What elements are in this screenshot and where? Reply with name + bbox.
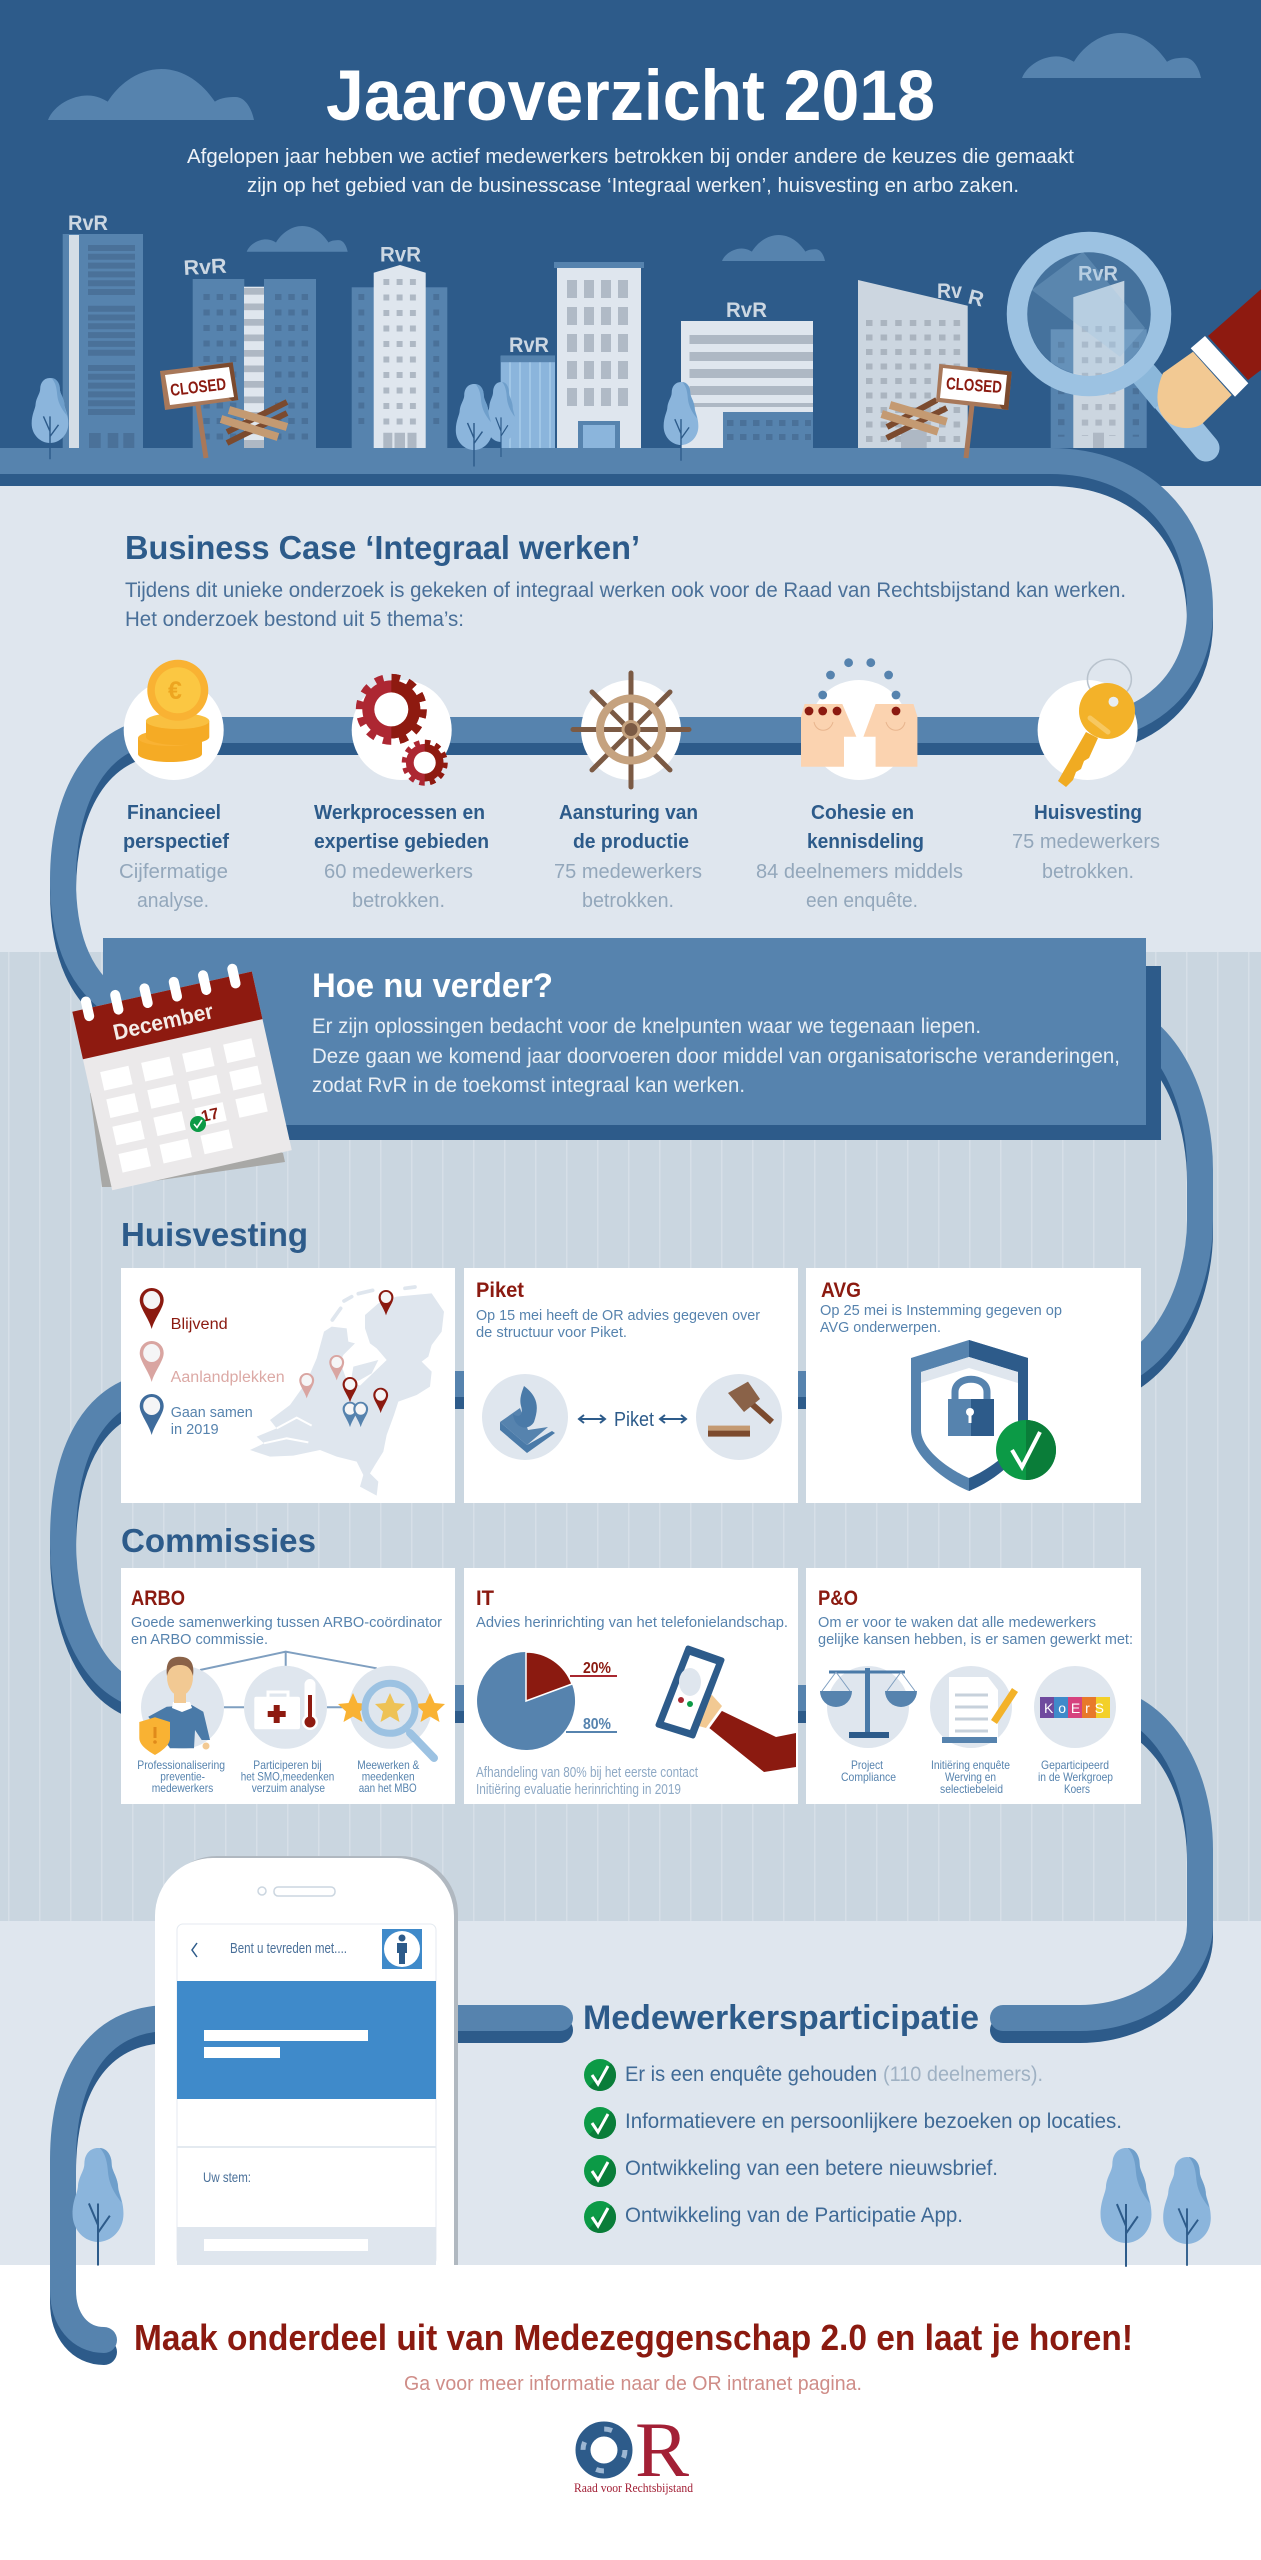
- panel: ARBO: ARBO: [131, 1587, 185, 1610]
- P&O labels: [841, 1758, 1113, 1796]
- building 6: [681, 299, 813, 448]
- background: business case: [0, 486, 1261, 952]
- panel: AVG: AVG: [821, 1279, 861, 1302]
- panel: IT: IT: [476, 1587, 494, 1610]
- intro text: [187, 146, 1074, 197]
- background: footer: [0, 2265, 1261, 2560]
- panel: Piket: Piket: [476, 1279, 524, 1302]
- icon: gears: [360, 678, 445, 783]
- theme 2 label: Werkprocessen en: [314, 802, 485, 824]
- icon: calendar: 17: [200, 1105, 221, 1126]
- P&O labels: Werving en: [945, 1770, 996, 1784]
- P&O labels: selectiebeleid: [940, 1782, 1003, 1796]
- building 3: [352, 244, 447, 448]
- building 2: [183, 255, 316, 448]
- theme 5 label: [1012, 802, 1160, 883]
- logo: [574, 2406, 693, 2495]
- background: participation: [0, 1921, 1261, 2265]
- theme 2 label: [314, 802, 489, 912]
- phone mockup: Bent u tevreden met....: [230, 1940, 347, 1957]
- icon: prevention worker: [139, 1657, 224, 1755]
- panel: IT: Afhandeling van 80% bij het eerste contact: [476, 1764, 699, 1781]
- theme 4 label: 84 deelnemers middels: [756, 861, 963, 883]
- heading: Huisvesting: Huisvesting: [121, 1216, 308, 1253]
- road: main serpentine path: [0, 461, 1200, 2340]
- checklist: Ontwikkeling van een betere nieuwsbrief.: [625, 2157, 998, 2180]
- title: Jaaroverzicht 2018: [326, 57, 935, 136]
- Netherlands map: [250, 1287, 444, 1496]
- building 8: [1051, 263, 1147, 448]
- closed sign right: [882, 364, 1012, 458]
- icon: calendar: December: [111, 998, 216, 1045]
- icon: two heads: [801, 658, 917, 767]
- theme 5 label: Huisvesting: [1034, 802, 1142, 824]
- icon: police flame: [482, 1374, 568, 1460]
- P&O labels: in de Werkgroep: [1038, 1770, 1113, 1784]
- icon: hand with phone: [658, 1648, 796, 1772]
- business case intro: [125, 579, 1126, 631]
- panel: Hoe nu verder: Er zijn oplossingen bedacht voor de knelpunten waar we tegenaan liepen.: [312, 1015, 981, 1038]
- checklist: Informatievere en persoonlijkere bezoeken op locaties.: [625, 2110, 1122, 2133]
- ARBO labels: verzuim analyse: [252, 1781, 325, 1795]
- theme 1 label: analyse.: [137, 890, 209, 912]
- pie chart: 80%: [583, 1716, 611, 1733]
- ARBO labels: Professionalisering: [137, 1758, 225, 1772]
- building 5: [554, 262, 644, 448]
- arrows and Piket label: [579, 1409, 686, 1431]
- theme 5 label: 75 medewerkers: [1012, 831, 1160, 853]
- building 7: Rv: [937, 280, 962, 303]
- ARBO labels: preventie-: [160, 1770, 205, 1784]
- heading: Commissies: Commissies: [121, 1522, 316, 1559]
- connector lines: [200, 1652, 377, 1707]
- map pins: [299, 1290, 393, 1427]
- legend: [140, 1288, 285, 1438]
- panel: P&O: [806, 1568, 1141, 1804]
- P&O labels: Initiëring enquête: [931, 1758, 1010, 1772]
- panel: Hoe nu verder: [103, 938, 1161, 1140]
- building 3: RvR: [380, 244, 421, 267]
- heading: Business Case: Business Case ‘Integraal werken’: [125, 529, 640, 566]
- road: shadow: [0, 473, 1200, 2352]
- building 7: [858, 280, 986, 448]
- P&O labels: Koers: [1064, 1782, 1090, 1796]
- icon: magnifier with stars: [338, 1666, 445, 1758]
- building 6: RvR: [726, 299, 767, 322]
- closed sign left: CLOSED: [169, 374, 227, 400]
- panel: Piket: [464, 1268, 798, 1503]
- theme 4 label: Cohesie en: [811, 802, 914, 824]
- trees: [73, 2148, 1211, 2267]
- icon: calendar: [70, 960, 292, 1190]
- background: striped section: [0, 952, 1261, 1921]
- building 8: RvR: [1078, 263, 1118, 286]
- icon: first aid and thermometer: [244, 1666, 327, 1749]
- closed sign left: [160, 362, 287, 458]
- business case intro: Tijdens dit unieke onderzoek is gekeken of integraal werken ook voor de Raad van Rechtsbijstand kan werken.: [125, 579, 1126, 602]
- panel: ARBO: [121, 1568, 455, 1804]
- clouds: [48, 33, 1201, 261]
- ARBO labels: Participeren bij: [253, 1758, 322, 1772]
- business case intro: Het onderzoek bestond uit 5 thema’s:: [125, 608, 464, 631]
- icon: key: [1058, 659, 1135, 787]
- building 4: [501, 334, 555, 448]
- legend: Gaan samen: [171, 1404, 253, 1421]
- theme 3 label: 75 medewerkers: [554, 861, 702, 883]
- theme 1 label: Cijfermatige: [119, 861, 228, 883]
- building 2: RvR: [183, 255, 227, 280]
- icon: scales: [820, 1666, 917, 1748]
- icon: coins: [138, 660, 209, 762]
- ARBO labels: het SMO,meedenken: [241, 1770, 334, 1784]
- theme 2 label: expertise gebieden: [314, 831, 489, 853]
- ARBO labels: [137, 1758, 419, 1795]
- checklist: (110 deelnemers).: [883, 2063, 1043, 2086]
- checklist: [584, 2059, 1122, 2233]
- building 4: RvR: [509, 334, 549, 357]
- pie chart: [477, 1652, 617, 1750]
- legend: in 2019: [171, 1421, 219, 1438]
- icon: ship wheel: [573, 673, 689, 787]
- panel: Hoe nu verder: Hoe nu verder?: [312, 967, 553, 1005]
- phone mockup: [155, 1856, 458, 2265]
- icon: document and pencil: [930, 1666, 1018, 1748]
- intro text: Afgelopen jaar hebben we actief medewerkers betrokken bij onder andere de keuzes die gemaakt: [187, 146, 1074, 168]
- panel: AVG: [806, 1268, 1141, 1503]
- magnifying glass with hand: [1017, 242, 1261, 448]
- closed sign right: CLOSED: [945, 374, 1003, 397]
- intro text: zijn op het gebied van de businesscase ‘Integraal werken’, huisvesting en arbo zaken.: [247, 175, 1019, 197]
- icon: shield with lock: [911, 1340, 1056, 1491]
- icon: gavel: [696, 1374, 782, 1460]
- panel: IT: Initiëring evaluatie herinrichting in 2019: [476, 1781, 681, 1798]
- legend: Blijvend: [171, 1316, 228, 1333]
- panel: IT: [464, 1568, 798, 1804]
- P&O labels: Geparticipeerd: [1041, 1758, 1109, 1772]
- panel: map card: [121, 1268, 455, 1503]
- icon: Koers logo: [1034, 1666, 1116, 1748]
- theme 3 label: betrokken.: [582, 890, 674, 912]
- panel: Hoe nu verder: zodat RvR in de toekomst integraal kan werken.: [312, 1074, 745, 1097]
- phone mockup: Uw stem:: [203, 2169, 251, 2185]
- checklist: Ontwikkeling van de Participatie App.: [625, 2204, 963, 2227]
- legend: Aanlandplekken: [171, 1369, 285, 1386]
- ARBO labels: Meewerken &: [357, 1758, 419, 1772]
- ARBO labels: medewerkers: [152, 1781, 213, 1795]
- building 1: [63, 212, 143, 448]
- logo: R: [635, 2406, 689, 2493]
- theme 4 label: een enquête.: [806, 890, 918, 912]
- theme 3 label: Aansturing van: [559, 802, 698, 824]
- building 1: RvR: [68, 212, 108, 235]
- ARBO labels: aan het MBO: [359, 1781, 417, 1795]
- theme 1 label: perspectief: [123, 831, 229, 853]
- logo: Raad voor Rechtsbijstand: [574, 2480, 693, 2495]
- theme 2 label: betrokken.: [352, 890, 445, 912]
- theme 1 label: Financieel: [127, 802, 221, 824]
- panel: Hoe nu verder: Deze gaan we komend jaar doorvoeren door middel van organisatorische veranderingen,: [312, 1045, 1120, 1068]
- icon: Koers logo: KoErS: [1044, 1700, 1104, 1716]
- panel: AVG: Op 25 mei is Instemming gegeven op: [820, 1302, 1062, 1319]
- panel: P&O: gelijke kansen hebben, is er samen gewerkt met:: [818, 1631, 1133, 1648]
- theme 3 label: de productie: [573, 831, 689, 853]
- panel: P&O: P&O: [818, 1587, 858, 1610]
- skyline trees: [32, 378, 698, 466]
- P&O labels: Compliance: [841, 1770, 896, 1784]
- panel: IT: Advies herinrichting van het telefonielandschap.: [476, 1614, 788, 1631]
- app icon: [382, 1929, 422, 1969]
- heading: Medewerkersparticipatie: Medewerkersparticipatie: [583, 1999, 979, 2037]
- ARBO labels: meedenken: [362, 1770, 415, 1784]
- theme 4 label: [756, 802, 963, 912]
- theme 4 label: kennisdeling: [807, 831, 924, 853]
- checklist: Er is een enquête gehouden: [625, 2063, 877, 2086]
- panel: ARBO: Goede samenwerking tussen ARBO-coördinator: [131, 1614, 442, 1631]
- pie chart: 20%: [583, 1660, 611, 1677]
- panel: P&O: Om er voor te waken dat alle medewerkers: [818, 1614, 1096, 1631]
- panel: AVG: AVG onderwerpen.: [820, 1319, 941, 1336]
- subline: Ga voor meer informatie naar de OR intranet pagina.: [404, 2373, 862, 2395]
- building 7: R: [966, 286, 986, 312]
- icon: coins: €: [168, 677, 182, 705]
- P&O labels: Project: [851, 1758, 884, 1772]
- theme 5 label: betrokken.: [1042, 861, 1134, 883]
- panel: Piket: de structuur voor Piket.: [476, 1324, 627, 1341]
- theme circles: [124, 680, 1138, 780]
- background: header: [0, 0, 1261, 486]
- panel: Piket: Op 15 mei heeft de OR advies gegeven over: [476, 1307, 760, 1324]
- theme 1 label: [119, 802, 229, 912]
- arrows and Piket label: Piket: [614, 1409, 654, 1431]
- theme 2 label: 60 medewerkers: [324, 861, 473, 883]
- theme 3 label: [554, 802, 702, 912]
- skyline: buildings: [63, 212, 1147, 448]
- panel: ARBO: en ARBO commissie.: [131, 1631, 268, 1648]
- call to action: Maak onderdeel uit van Medezeggenschap 2.0 en laat je horen!: [134, 2317, 1133, 2358]
